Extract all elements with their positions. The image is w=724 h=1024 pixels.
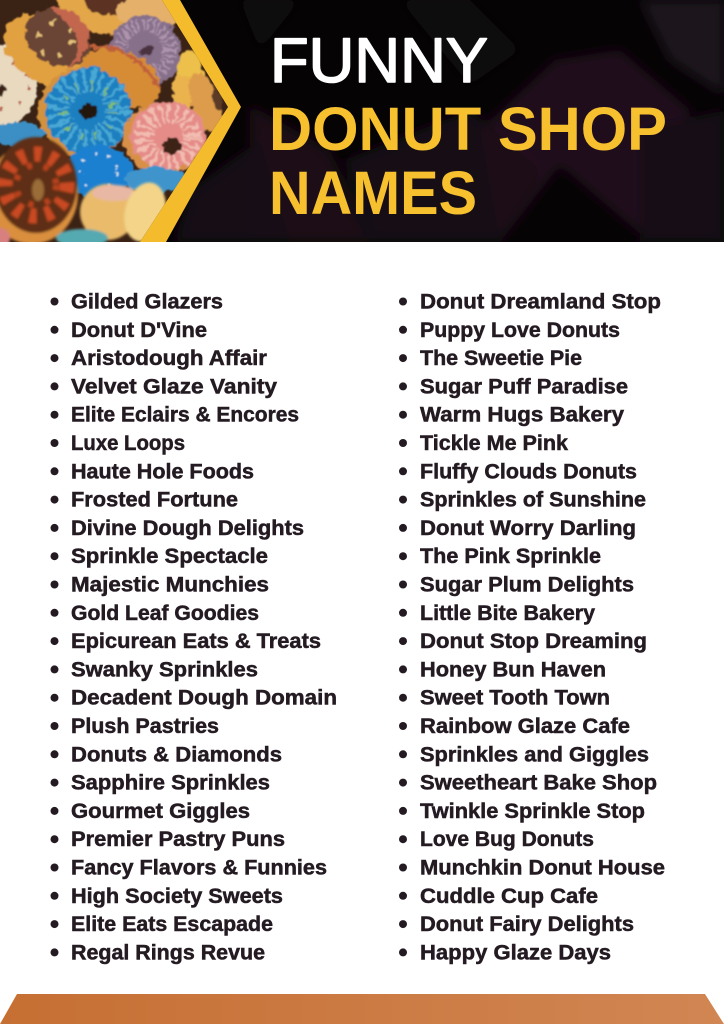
- list column 2: cute names: The Sweetie Pie: [420, 347, 582, 370]
- list column 2: cute names: Sweet Tooth Town: [420, 687, 610, 710]
- tan side donut: [80, 42, 162, 110]
- list column 2: cute names: Sprinkles of Sunshine: [420, 489, 646, 512]
- title line: DONUT SHOP: DONUT SHOP: [269, 95, 667, 163]
- top right tan donut: [114, 0, 176, 26]
- title line: NAMES: NAMES: [269, 159, 477, 227]
- donut photo: [0, 0, 240, 248]
- list column 2: cute names: Sweetheart Bake Shop: [420, 772, 657, 795]
- list column 2: cute names: Sprinkles and Giggles: [420, 743, 649, 766]
- list column 1: upscale names: Gilded Glazers: [71, 290, 223, 314]
- list column 1: upscale names: Donut D'Vine: [71, 319, 207, 342]
- teal donut bottom: [54, 227, 110, 242]
- list column 1: upscale names: Elite Eclairs & Encores: [71, 404, 299, 427]
- chocolate glazed donut: [2, 5, 92, 88]
- list column 1: upscale names: Decadent Dough Domain: [71, 687, 337, 710]
- white sprinkled donut: [0, 45, 37, 125]
- list column 1: upscale names: High Society Sweets: [71, 885, 283, 908]
- list column 1: upscale names: Gold Leaf Goodies: [71, 602, 259, 625]
- list column 1: upscale names: Plush Pastries: [71, 715, 219, 738]
- pale yellow donuts: [78, 180, 168, 242]
- list column 2: cute names: Puppy Love Donuts: [420, 319, 620, 342]
- list column 1: upscale names: Elite Eats Escapade: [71, 913, 273, 936]
- footer orange trapezoid: [0, 994, 724, 1024]
- list column 2: cute names: Fluffy Clouds Donuts: [420, 460, 637, 483]
- list column 2: cute names: Sugar Puff Paradise: [420, 375, 628, 398]
- list column 1: upscale names: Divine Dough Delights: [71, 517, 304, 540]
- list column 2: cute names: Donut Worry Darling: [420, 517, 636, 540]
- blue donut lower middle: [63, 146, 133, 198]
- small blue donut right: [125, 166, 185, 194]
- list column 1: upscale names: Luxe Loops: [71, 432, 185, 455]
- list column 2: cute names: [399, 290, 665, 964]
- list column 1: upscale names: Regal Rings Revue: [71, 941, 265, 964]
- list column 1: upscale names: Aristodough Affair: [71, 347, 267, 370]
- top donut: [56, 0, 128, 37]
- list column 1: upscale names: Velvet Glaze Vanity: [71, 375, 277, 398]
- list column 2: cute names: Little Bite Bakery: [420, 602, 595, 625]
- list column 2: cute names: Love Bug Donuts: [420, 828, 594, 851]
- chocolate donut with red sprinkles: [0, 137, 78, 244]
- list column 2: cute names: Rainbow Glaze Cafe: [420, 715, 630, 738]
- list column 1: upscale names: Sprinkle Spectacle: [71, 545, 268, 568]
- list column 2: cute names: Happy Glaze Days: [420, 941, 611, 964]
- blue sprinkled donut: [38, 67, 131, 157]
- list column 2: cute names: Donut Fairy Delights: [420, 913, 634, 936]
- list column 2: cute names: Donut Stop Dreaming: [420, 630, 647, 653]
- list column 2: cute names: Tickle Me Pink: [420, 432, 568, 455]
- list column 2: cute names: Donut Dreamland Stop: [420, 290, 661, 314]
- gold chevron frame: [140, 0, 241, 242]
- list column 1: upscale names: Epicurean Eats & Treats: [71, 630, 321, 653]
- blue far left: [0, 122, 44, 146]
- list column 2: cute names: Munchkin Donut House: [420, 856, 665, 880]
- list column 2: cute names: Twinkle Sprinkle Stop: [420, 800, 645, 823]
- header band: [0, 0, 724, 248]
- purple sprinkled donut: [109, 16, 181, 88]
- header dark geometric background: [140, 0, 724, 242]
- pink corner: [0, 228, 10, 248]
- list column 1: upscale names: Frosted Fortune: [71, 489, 238, 512]
- list column 1: upscale names: Haute Hole Foods: [71, 460, 254, 483]
- list column 2: cute names: The Pink Sprinkle: [420, 545, 601, 568]
- title: [272, 38, 665, 214]
- list column 1: upscale names: Gourmet Giggles: [71, 800, 250, 823]
- list column 1: upscale names: Donuts & Diamonds: [71, 743, 282, 766]
- list column 2: cute names: Cuddle Cup Cafe: [420, 885, 598, 908]
- list column 1: upscale names: Sapphire Sprinkles: [71, 772, 270, 795]
- list column 2: cute names: Warm Hugs Bakery: [420, 404, 624, 427]
- list column 1: upscale names: [50, 290, 337, 964]
- list column 2: cute names: Honey Bun Haven: [420, 658, 606, 681]
- list column 1: upscale names: Premier Pastry Puns: [71, 828, 285, 851]
- pink sprinkled donut: [123, 101, 206, 174]
- list column 2: cute names: Sugar Plum Delights: [420, 574, 634, 596]
- right side donuts: [170, 49, 223, 133]
- list column 1: upscale names: Majestic Munchies: [71, 574, 269, 596]
- list column 1: upscale names: Swanky Sprinkles: [71, 658, 258, 681]
- title line: FUNNY: FUNNY: [270, 26, 488, 96]
- list column 1: upscale names: Fancy Flavors & Funnies: [71, 856, 327, 880]
